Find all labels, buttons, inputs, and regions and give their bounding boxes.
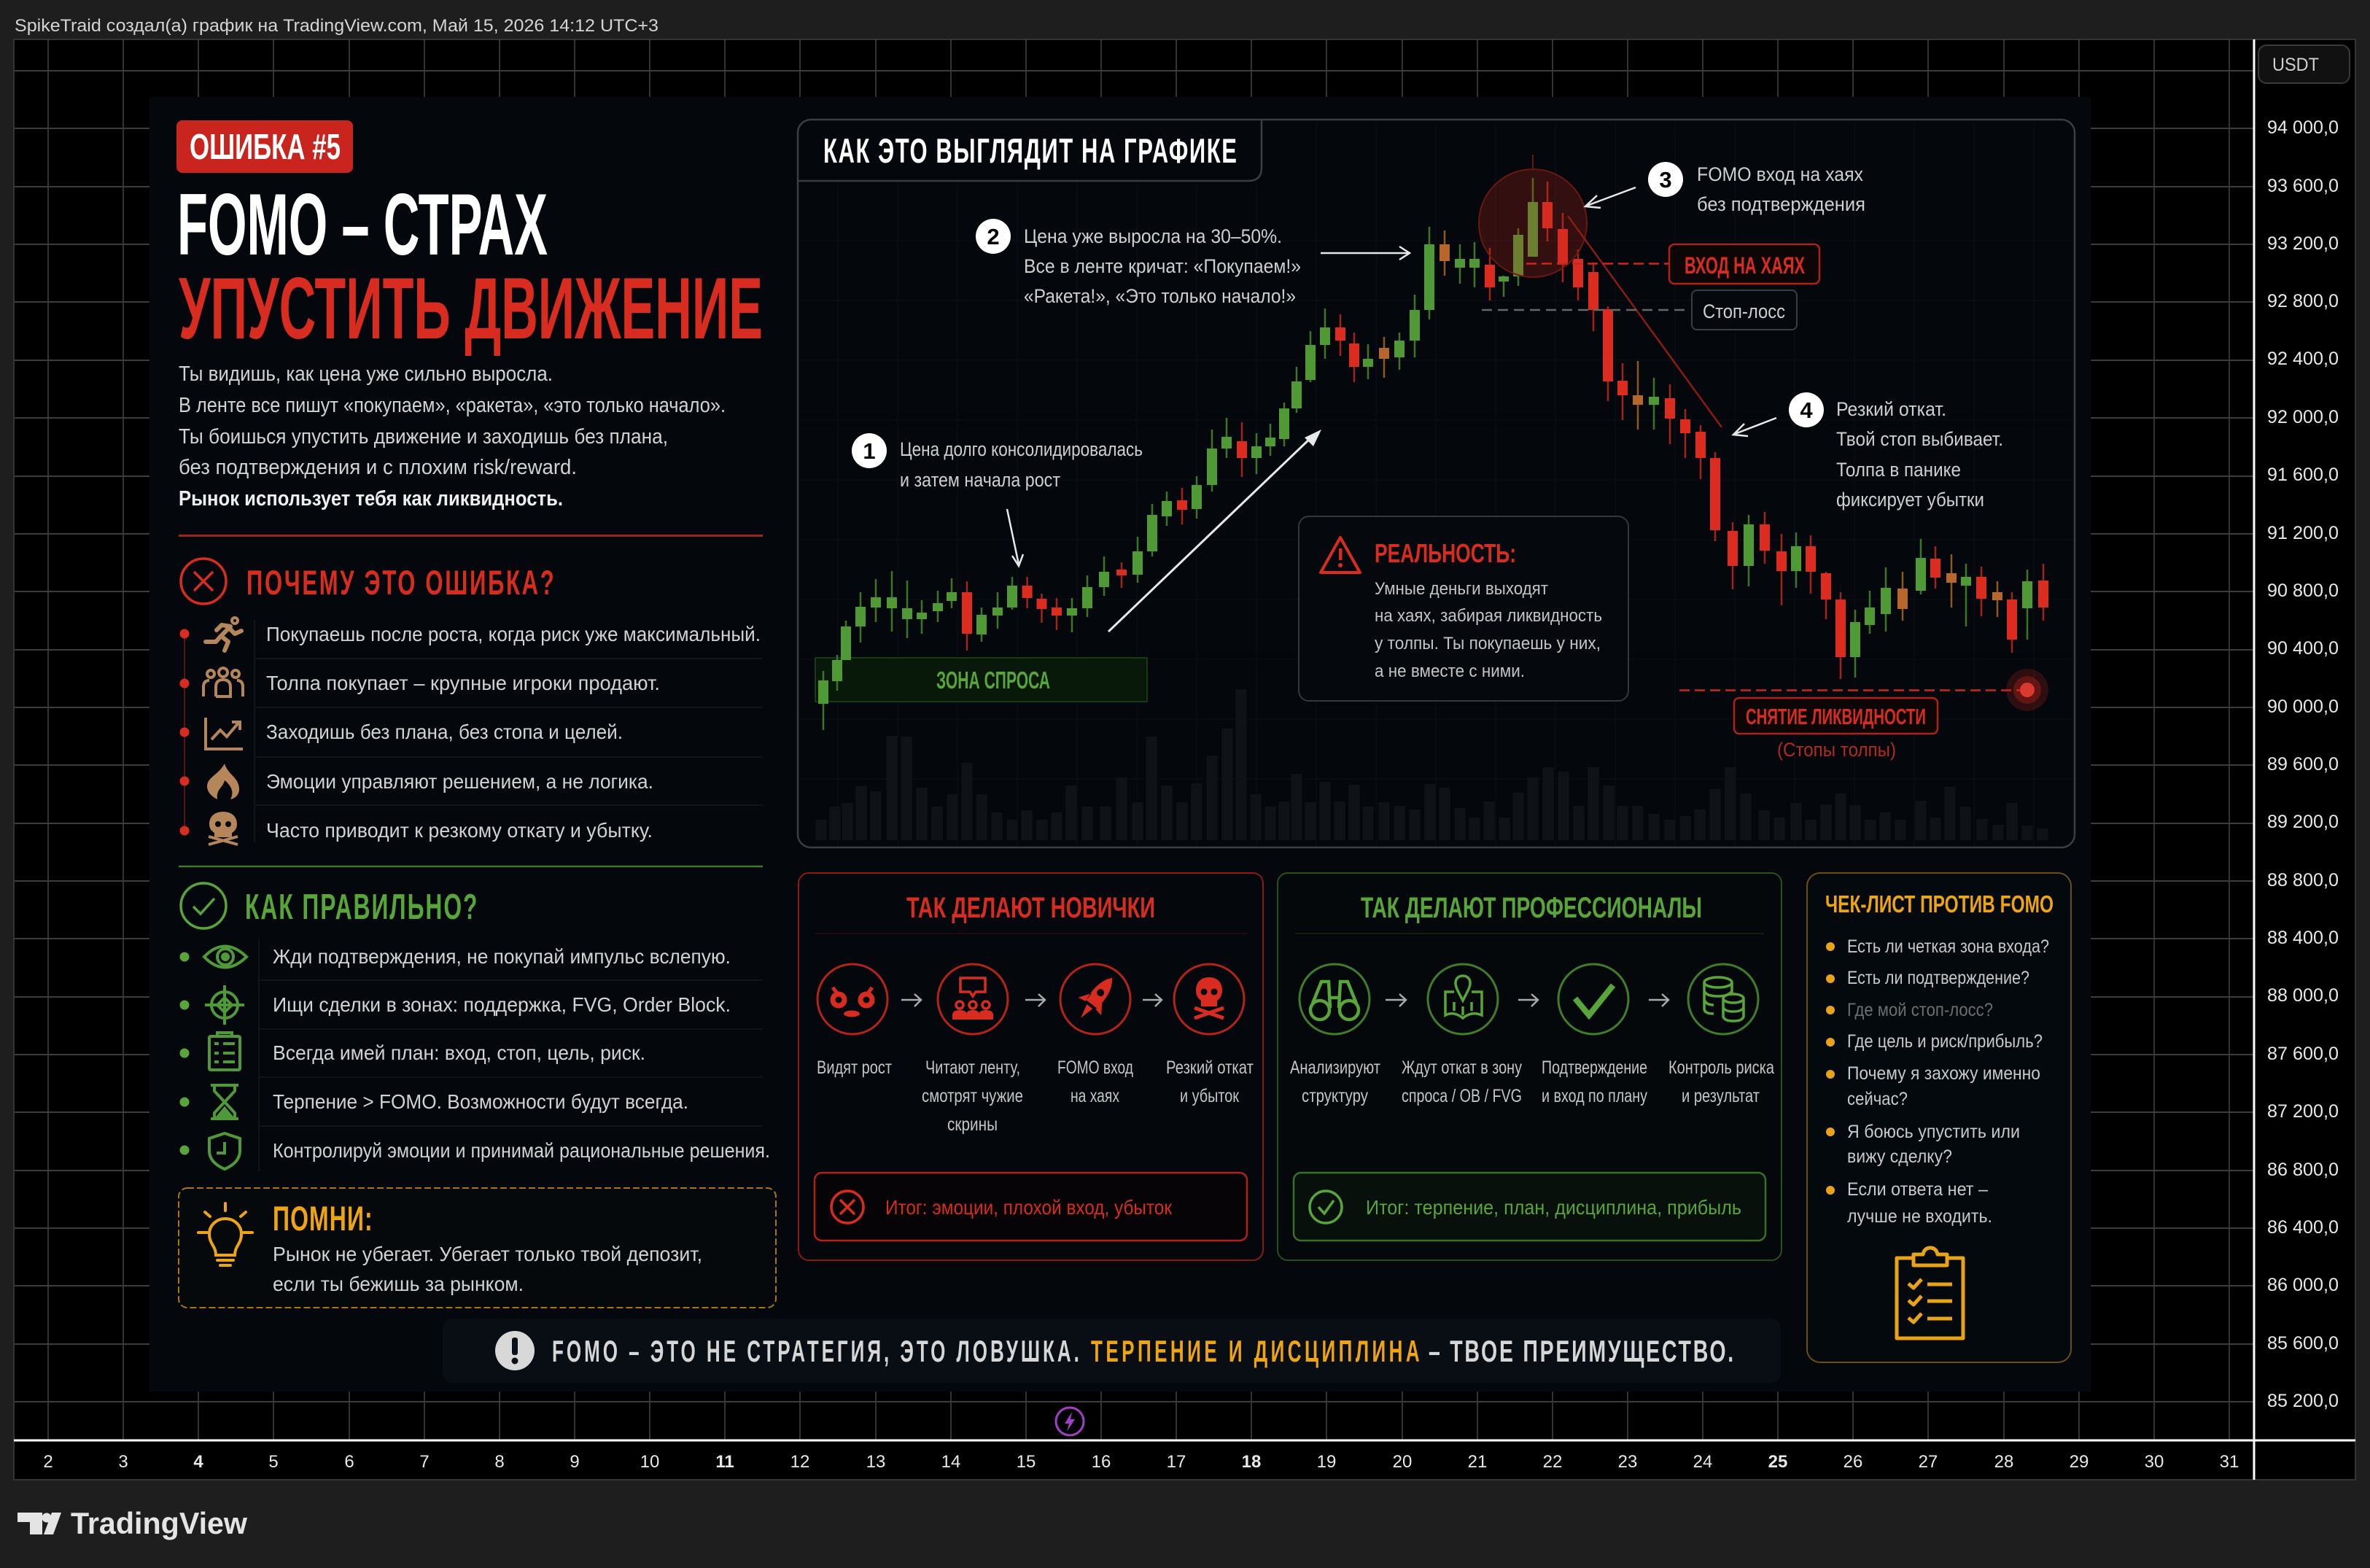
date axis labels: 8 xyxy=(494,1452,505,1472)
list: checklist items: Почему я захожу именно xyxy=(1847,1063,2040,1084)
result: professionals xyxy=(1294,1173,1765,1241)
date axis labels: 11 xyxy=(715,1452,734,1472)
list: mistakes: Часто приводит к резкому откату и убытку. xyxy=(266,819,653,842)
date axis labels: 6 xyxy=(344,1452,354,1472)
icon: eye xyxy=(204,947,246,967)
list: mistakes: Заходишь без плана, без стопа и целей. xyxy=(266,721,623,743)
date axis labels: 31 xyxy=(2220,1452,2239,1472)
callout: reality xyxy=(1299,516,1628,701)
date axis labels: 5 xyxy=(268,1452,279,1472)
list: right actions xyxy=(273,945,770,1162)
price axis labels: 92 000,0 xyxy=(2267,407,2339,427)
annotation 1: Цена долго консолидировалась xyxy=(900,438,1143,460)
step labels: newbies: и убыток xyxy=(1180,1086,1240,1106)
arrow xyxy=(1649,994,1668,1006)
list: checklist items: Есть ли подтверждение? xyxy=(1847,968,2029,988)
date axis labels: 21 xyxy=(1468,1452,1487,1472)
icon: skull xyxy=(209,812,238,845)
date axis labels: 27 xyxy=(1919,1452,1938,1472)
panel: chart example xyxy=(798,120,2075,847)
list: right actions: Ищи сделки в зонах: поддержка, FVG, Order Block. xyxy=(273,993,731,1016)
step icon: coins xyxy=(1688,964,1758,1034)
list: right actions: Всегда имей план: вход, стоп, цель, риск. xyxy=(273,1041,645,1064)
list: mistakes: Толпа покупает – крупные игроки продают. xyxy=(266,672,660,694)
liquidity label xyxy=(1734,698,1938,761)
bottom banner xyxy=(443,1319,1781,1383)
annotation 2: Все в ленте кричат: «Покупаем!» xyxy=(1024,255,1301,277)
liquidity sweep line and marker xyxy=(1679,669,2048,711)
date axis labels: 14 xyxy=(941,1452,960,1472)
price axis labels: 89 200,0 xyxy=(2267,812,2339,832)
icon: crosshair xyxy=(205,985,244,1025)
annotation 4: 4 xyxy=(1800,397,1813,423)
annotation 2: Цена уже выросла на 30–50%. xyxy=(1024,225,1282,247)
USDT currency button xyxy=(2258,45,2350,83)
annotation 2: 2 xyxy=(987,224,1000,249)
icon: clipboard xyxy=(209,1033,240,1070)
TradingView logo: TradingView xyxy=(71,1506,247,1540)
icon: chart xyxy=(206,718,243,749)
step labels: professionals: Анализируют xyxy=(1290,1057,1380,1078)
annotation 4: Толпа в панике xyxy=(1836,459,1961,481)
arrow xyxy=(1025,994,1045,1006)
price axis labels: 86 800,0 xyxy=(2267,1160,2339,1180)
date axis labels: 4 xyxy=(193,1452,203,1472)
price axis labels: 85 600,0 xyxy=(2267,1333,2339,1354)
icon: warning triangle xyxy=(1321,537,1360,573)
list: checklist items: Если ответа нет – xyxy=(1847,1179,1988,1200)
heading: checklist: ЧЕК-ЛИСТ ПРОТИВ FOMO xyxy=(1825,890,2054,917)
candlesticks xyxy=(823,178,2043,730)
step icon: map pin xyxy=(1428,964,1498,1034)
price axis labels: 93 600,0 xyxy=(2267,176,2339,196)
price axis labels: 93 200,0 xyxy=(2267,233,2339,254)
date axis labels: 10 xyxy=(640,1452,659,1472)
price axis labels: 88 800,0 xyxy=(2267,870,2339,890)
result: newbies: Итог: эмоции, плохой вход, убыток xyxy=(885,1196,1173,1219)
diagonal drop line xyxy=(1568,216,1722,427)
step labels: professionals: Контроль риска xyxy=(1668,1057,1774,1078)
step labels: professionals: и результат xyxy=(1682,1086,1760,1106)
arrow xyxy=(1518,994,1538,1006)
annotation 1 xyxy=(852,433,1143,566)
icon: light bulb xyxy=(198,1203,252,1265)
list: checklist items xyxy=(1847,936,2049,1227)
list: checklist items: вижу сделку? xyxy=(1847,1146,1952,1167)
icon: crowd xyxy=(203,668,243,696)
callout: reality: а не вместе с ними. xyxy=(1375,661,1525,681)
annotation 1: и затем начала рост xyxy=(900,469,1060,491)
icon: shield xyxy=(209,1133,240,1169)
annotation 4 xyxy=(1733,392,2003,511)
entry at highs label xyxy=(1526,244,1819,284)
price axis labels: 92 400,0 xyxy=(2267,349,2339,369)
intro text block: Ты боишься упустить движение и заходишь без плана, xyxy=(179,425,668,449)
heading: professionals: ТАК ДЕЛАЮТ ПРОФЕССИОНАЛЫ xyxy=(1361,892,1702,924)
price axis labels: 89 600,0 xyxy=(2267,754,2339,775)
step labels: professionals xyxy=(1290,1057,1774,1106)
date axis labels: 2 xyxy=(43,1452,53,1472)
date axis labels: 19 xyxy=(1317,1452,1336,1472)
heading: how right: КАК ПРАВИЛЬНО? xyxy=(245,887,478,927)
list: mistakes: Эмоции управляют решением, а не логика. xyxy=(266,770,653,793)
step labels: professionals: структуру xyxy=(1302,1086,1368,1106)
step labels: professionals: Ждут откат в зону xyxy=(1402,1057,1522,1078)
price axis labels: 85 200,0 xyxy=(2267,1391,2339,1411)
annotation 3 xyxy=(1585,162,1865,215)
intro text block: Ты видишь, как цена уже сильно выросла. xyxy=(179,362,553,386)
icon: exclamation xyxy=(495,1331,535,1370)
heading: remember: ПОМНИ: xyxy=(273,1200,373,1238)
demand zone xyxy=(815,658,1147,702)
badge: error number: ОШИБКА #5 xyxy=(190,128,341,167)
price axis labels: 90 800,0 xyxy=(2267,581,2339,601)
list: checklist items: Я боюсь упустить или xyxy=(1847,1122,2020,1142)
date axis labels: 17 xyxy=(1167,1452,1186,1472)
date axis labels: 7 xyxy=(419,1452,430,1472)
icon: clipboard checklist xyxy=(1897,1248,1963,1338)
price axis labels: 88 400,0 xyxy=(2267,928,2339,948)
price axis labels: 90 400,0 xyxy=(2267,638,2339,659)
panel: newbies xyxy=(799,873,1263,1260)
annotation 2 xyxy=(976,219,1410,307)
title xyxy=(177,176,763,357)
arrow xyxy=(1386,994,1406,1006)
step icon: skull xyxy=(1174,964,1244,1034)
step icon: binoculars xyxy=(1299,964,1369,1034)
icon: red cross circle xyxy=(181,559,226,604)
price axis labels: 90 000,0 xyxy=(2267,696,2339,717)
date axis labels: 12 xyxy=(790,1452,809,1472)
price axis labels: 92 800,0 xyxy=(2267,291,2339,311)
date axis labels: 26 xyxy=(1843,1452,1862,1472)
liquidity label: СНЯТИЕ ЛИКВИДНОСТИ xyxy=(1746,704,1926,729)
price axis labels: 87 200,0 xyxy=(2267,1101,2339,1122)
date axis labels: 24 xyxy=(1693,1452,1712,1472)
date axis labels: 20 xyxy=(1393,1452,1412,1472)
step icon: check xyxy=(1558,964,1628,1034)
callout: reality: РЕАЛЬНОСТЬ: xyxy=(1375,538,1516,568)
list: checklist items: Есть ли четкая зона входа? xyxy=(1847,936,2049,957)
stop loss label: Стоп-лосс xyxy=(1703,300,1785,322)
price axis labels: 94 000,0 xyxy=(2267,117,2339,138)
annotation 4: Твой стоп выбивает. xyxy=(1836,428,2003,450)
step icon: rocket xyxy=(1060,964,1130,1034)
panel: professionals xyxy=(1278,873,1782,1260)
intro text block: без подтверждения и с плохим risk/reward. xyxy=(179,456,577,479)
annotation 3: 3 xyxy=(1659,167,1672,193)
header attribution: SpikeTraid создал(а) график на TradingView.com, Май 15, 2026 14:12 UTC+3 xyxy=(15,16,658,36)
price axis labels: 86 400,0 xyxy=(2267,1217,2339,1238)
list: checklist items: лучше не входить. xyxy=(1847,1206,1992,1227)
callout: reality: у толпы. Ты покупаешь у них, xyxy=(1375,634,1601,653)
intro text block: В ленте все пишут «покупаем», «ракета», «это только начало». xyxy=(179,394,726,417)
list: right actions: Жди подтверждения, не покупай импульс вслепую. xyxy=(273,945,731,968)
step labels: professionals: спроса / OB / FVG xyxy=(1402,1086,1522,1106)
icon: green check circle xyxy=(181,883,226,928)
big trend arrow xyxy=(1108,430,1321,632)
liquidity label: (Стопы толпы) xyxy=(1777,739,1896,761)
step icon: reading feed xyxy=(938,964,1008,1034)
list: mistakes xyxy=(266,623,761,842)
step labels: professionals: и вход по плану xyxy=(1542,1086,1647,1106)
date axis labels: 18 xyxy=(1242,1452,1261,1472)
section: why it is a mistake xyxy=(179,559,762,845)
bottom banner: ТЕРПЕНИЕ И ДИСЦИПЛИНА xyxy=(1091,1335,1420,1369)
date axis labels: 15 xyxy=(1017,1452,1036,1472)
arrow xyxy=(901,994,921,1006)
price axis labels: 87 600,0 xyxy=(2267,1044,2339,1064)
step labels: professionals: Подтверждение xyxy=(1542,1057,1647,1078)
icon: hourglass xyxy=(211,1085,238,1119)
stop loss label xyxy=(1482,290,1797,330)
annotation 4: Резкий откат. xyxy=(1836,398,1946,420)
tab title xyxy=(798,120,1262,181)
date axis labels xyxy=(43,1452,2239,1472)
heading: newbies: ТАК ДЕЛАЮТ НОВИЧКИ xyxy=(906,892,1155,924)
step labels: newbies: смотрят чужие xyxy=(922,1086,1023,1106)
result: professionals: Итог: терпение, план, дисциплина, прибыль xyxy=(1366,1196,1741,1219)
intro text block xyxy=(179,362,726,511)
date axis labels: 25 xyxy=(1768,1452,1787,1472)
list: right actions: Терпение > FOMO. Возможности будут всегда. xyxy=(273,1090,688,1113)
fomo highlight circle xyxy=(1479,169,1587,277)
step icon: angry face xyxy=(817,964,887,1034)
annotation 3: FOMO вход на хаях xyxy=(1697,163,1863,185)
panel: checklist xyxy=(1807,873,2071,1362)
step labels: newbies: Резкий откат xyxy=(1166,1057,1254,1078)
callout: remember: если ты бежишь за рынком. xyxy=(273,1273,524,1295)
step labels: newbies: на хаях xyxy=(1071,1086,1119,1106)
step labels: newbies: Видят рост xyxy=(817,1057,892,1078)
demand zone: ЗОНА СПРОСА xyxy=(936,667,1050,694)
icon: flame xyxy=(207,764,239,799)
date axis labels: 13 xyxy=(866,1452,885,1472)
price axis labels: 88 000,0 xyxy=(2267,985,2339,1006)
date axis labels: 23 xyxy=(1618,1452,1637,1472)
list: checklist items: сейчас? xyxy=(1847,1089,1908,1109)
list: checklist items: Где цель и риск/прибыль? xyxy=(1847,1031,2043,1052)
volume bars xyxy=(821,689,2043,840)
intro text block: Рынок использует тебя как ликвидность. xyxy=(179,487,563,511)
step labels: newbies: Читают ленту, xyxy=(925,1057,1020,1078)
price axis labels: 91 200,0 xyxy=(2267,523,2339,543)
date axis labels: 3 xyxy=(118,1452,128,1472)
price axis labels: 91 600,0 xyxy=(2267,465,2339,485)
date axis labels: 22 xyxy=(1543,1452,1562,1472)
tab title: КАК ЭТО ВЫГЛЯДИТ НА ГРАФИКЕ xyxy=(823,133,1237,171)
step labels: newbies xyxy=(817,1057,1254,1135)
annotation 1: 1 xyxy=(863,438,876,464)
annotation 2: «Ракета!», «Это только начало!» xyxy=(1024,285,1296,307)
date axis labels: 16 xyxy=(1092,1452,1111,1472)
annotation 3: без подтверждения xyxy=(1697,193,1865,215)
date axis labels: 9 xyxy=(570,1452,580,1472)
step labels: newbies: FOMO вход xyxy=(1057,1057,1133,1078)
step labels: newbies: скрины xyxy=(947,1114,998,1135)
price axis labels xyxy=(2267,117,2339,1411)
date axis labels: 30 xyxy=(2145,1452,2164,1472)
callout: reality: Умные деньги выходят xyxy=(1375,579,1548,599)
icon: lightning event xyxy=(1056,1408,1084,1435)
list: checklist items: Где мой стоп-лосс? xyxy=(1847,1000,1993,1020)
arrow xyxy=(1143,994,1162,1006)
badge: error number xyxy=(176,120,353,173)
result: newbies xyxy=(815,1173,1247,1241)
annotation 4: фиксирует убытки xyxy=(1836,489,1984,511)
bottom banner: – ТВОЕ ПРЕИМУЩЕСТВО. xyxy=(1429,1333,1733,1368)
bottom banner: FOMO – ЭТО НЕ СТРАТЕГИЯ, ЭТО ЛОВУШКА. xyxy=(552,1335,1079,1369)
list: mistakes: Покупаешь после роста, когда риск уже максимальный. xyxy=(266,623,761,645)
entry at highs label: ВХОД НА ХАЯХ xyxy=(1685,252,1805,279)
callout: reality: на хаях, забирая ликвидность xyxy=(1375,606,1602,626)
title: УПУСТИТЬ ДВИЖЕНИЕ xyxy=(179,260,763,357)
title: FOMO – СТРАХ xyxy=(177,176,548,273)
section: how to do it right xyxy=(179,883,770,1172)
callout: remember: Рынок не убегает. Убегает только твой депозит, xyxy=(273,1243,702,1265)
callout: remember xyxy=(179,1188,776,1308)
price axis labels: 86 000,0 xyxy=(2267,1275,2339,1295)
icon: runner xyxy=(206,618,241,651)
infographic panel xyxy=(149,97,2091,1392)
date axis labels: 29 xyxy=(2070,1452,2089,1472)
USDT currency button: USDT xyxy=(2272,55,2319,75)
heading: why mistake: ПОЧЕМУ ЭТО ОШИБКА? xyxy=(246,564,554,602)
list: right actions: Контролируй эмоции и принимай рациональные решения. xyxy=(273,1139,770,1162)
date axis labels: 28 xyxy=(1994,1452,2013,1472)
